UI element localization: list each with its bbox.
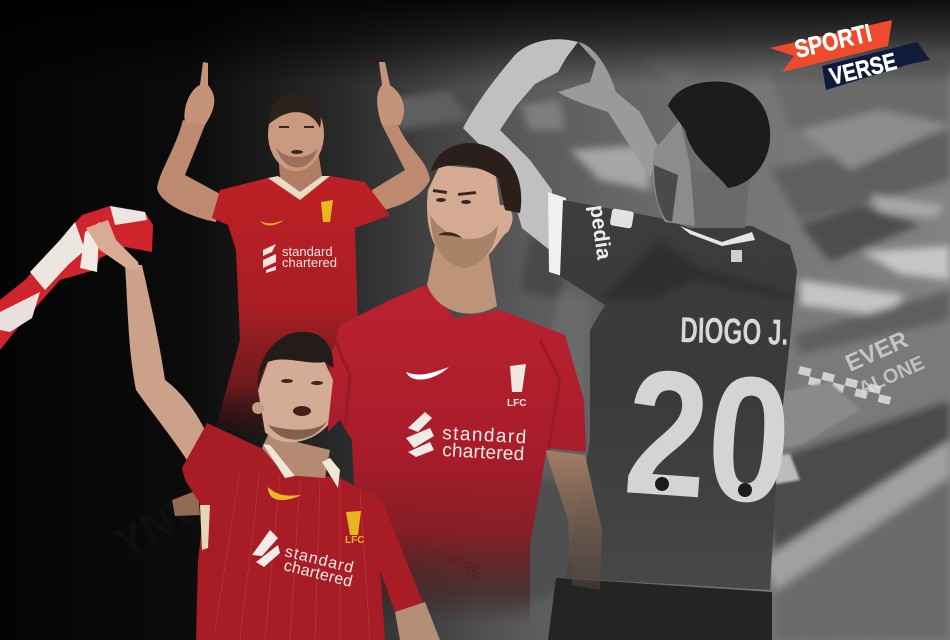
collar	[680, 226, 755, 246]
player: grey Diogo J. from behind with heart hands	[463, 39, 797, 640]
raised arms	[157, 120, 222, 222]
banner lettering: EVER	[841, 326, 912, 377]
sponsor text on sleeve: pedia	[585, 203, 616, 261]
player: top, pointing up	[157, 62, 430, 440]
neck	[262, 435, 330, 478]
crest: LFC	[507, 398, 526, 409]
red and white scarf with fist	[0, 206, 153, 350]
player: bottom, waving scarf	[125, 265, 440, 640]
logo: Sportiverse ribbon: SPORTI	[792, 19, 874, 64]
player: centre, looking up	[328, 143, 602, 625]
neck	[427, 245, 497, 314]
facial features	[281, 379, 323, 385]
sponsor: chartered	[282, 557, 354, 591]
sponsor: standard	[282, 244, 333, 259]
left arm	[545, 450, 602, 590]
raised arm	[125, 265, 205, 465]
logo: Sportiverse ribbon: VERSE	[827, 48, 899, 91]
facial features	[279, 126, 314, 154]
background: stadium tifo banners in greyscale: YNWA	[107, 464, 246, 569]
shirt	[328, 285, 586, 625]
swoosh	[406, 367, 449, 380]
name on jersey: DIOGO J.	[680, 309, 789, 353]
crest	[731, 250, 742, 262]
swoosh	[268, 487, 301, 500]
collar	[268, 176, 330, 200]
fist	[86, 220, 140, 270]
sponsor logo: standard	[442, 423, 527, 448]
sponsor	[263, 244, 337, 273]
shirt	[182, 423, 424, 640]
facial features	[433, 189, 476, 238]
sponsor logo	[406, 412, 527, 465]
shirt	[212, 176, 390, 440]
crest	[345, 511, 364, 546]
crest: LFC	[345, 535, 364, 546]
sponsor: standard	[283, 543, 355, 577]
jersey	[560, 200, 797, 590]
sponsor logo: chartered	[442, 440, 525, 465]
logo: Sportiverse ribbon	[770, 19, 930, 91]
background: stadium tifo banners in greyscale: ALONE	[855, 352, 928, 401]
head	[427, 165, 513, 268]
sponsor	[252, 530, 355, 591]
sponsor: chartered	[282, 255, 337, 270]
swoosh and crest	[260, 220, 284, 225]
neck and face side	[660, 170, 750, 228]
background: stadium tifo banners in greyscale: R. ANDRE	[413, 534, 485, 582]
neck and head	[278, 150, 322, 195]
collar	[263, 444, 295, 478]
squad number 20: 20	[619, 331, 797, 541]
shorts	[548, 578, 772, 640]
arms and heart-shaped hands	[463, 39, 660, 276]
crest	[507, 364, 526, 409]
head	[258, 352, 333, 442]
hair	[668, 82, 770, 188]
forearm lower right	[395, 602, 440, 640]
